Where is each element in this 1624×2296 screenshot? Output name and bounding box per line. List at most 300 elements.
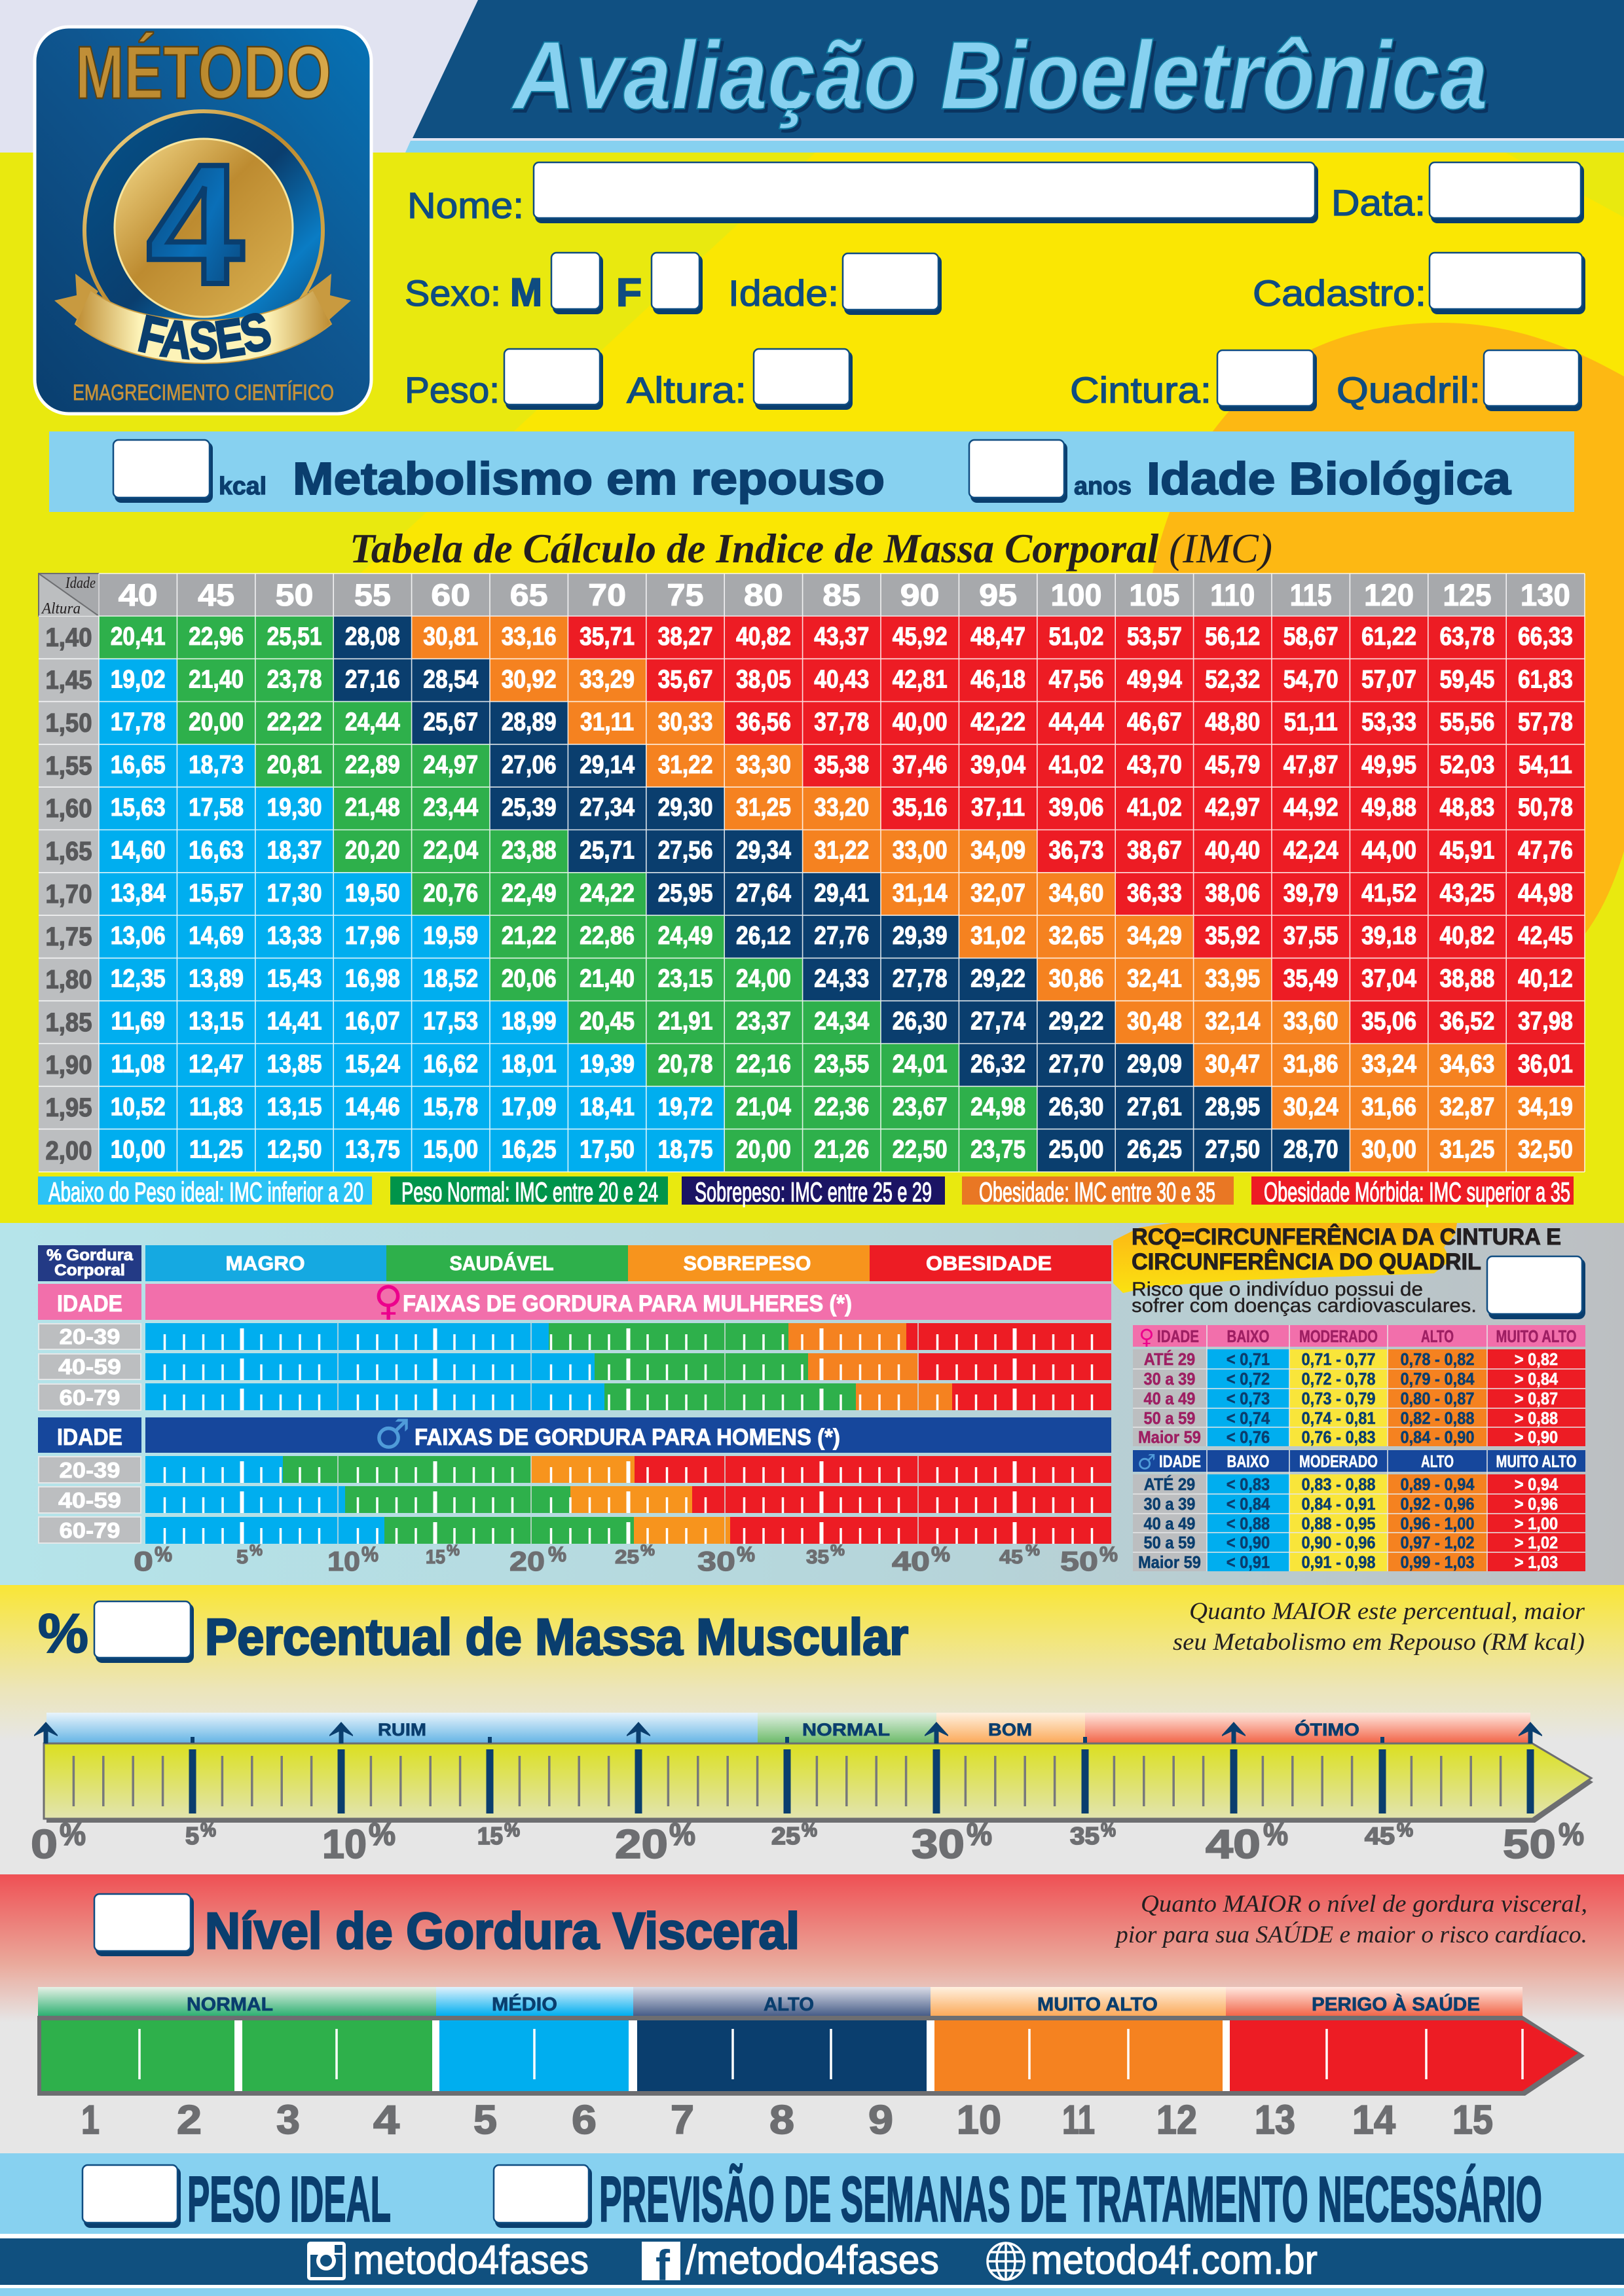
- row 2,00: 21,26: [814, 1135, 869, 1163]
- RCQ men table: 0,91 - 0,98: [1302, 1554, 1376, 1572]
- row 1,80: 35,49: [1283, 964, 1338, 993]
- visceral arrow bar: [37, 2016, 1585, 2096]
- row 1,70: 17,30: [267, 878, 322, 907]
- women header: FAIXAS DE GORDURA PARA MULHERES (*): [403, 1291, 852, 1317]
- row 1,70: 44,98: [1518, 878, 1573, 907]
- row 2,00: 28,70: [1283, 1135, 1338, 1163]
- row 1,85: 23,37: [736, 1006, 791, 1035]
- IMC legend: [38, 1176, 1574, 1207]
- height column: [39, 616, 99, 1172]
- row 1,55: 54,11: [1519, 750, 1572, 778]
- RCQ men table: 40 a 49: [1144, 1515, 1195, 1533]
- row 2,00: 10,00: [111, 1135, 166, 1163]
- row 1,70: 24,22: [580, 878, 635, 907]
- row 1,60: 50,78: [1518, 793, 1573, 822]
- table header: 120: [1364, 577, 1414, 612]
- row 1,85: 37,98: [1518, 1006, 1573, 1035]
- RCQ women table: < 0,71: [1227, 1351, 1270, 1369]
- row 2,00: 27,50: [1205, 1135, 1260, 1163]
- row 1,75: 37,55: [1283, 921, 1338, 950]
- row 1,40: 28,08: [345, 622, 400, 651]
- row 1,65: 31,22: [814, 835, 869, 864]
- table header: 110: [1210, 577, 1255, 612]
- IMC legend: Peso Normal: IMC entre 20 e 24: [401, 1176, 658, 1207]
- row 1,85: 20,45: [580, 1006, 635, 1035]
- row 1,70: 22,49: [502, 878, 557, 907]
- row 1,85: 29,22: [1049, 1006, 1103, 1035]
- muscle ruler arrow: [34, 1722, 1593, 1823]
- form fields: Peso:: [405, 369, 500, 410]
- RCQ description: Risco que o indivíduo possui de: [1132, 1279, 1423, 1300]
- visceral level numbers: 11: [1062, 2098, 1095, 2143]
- row 1,50: 36,56: [736, 707, 791, 736]
- row 1,60: 37,11: [971, 793, 1025, 822]
- RCQ men table: > 1,00: [1515, 1515, 1558, 1533]
- row 1,45: [99, 659, 1585, 702]
- row 1,40: 45,92: [893, 622, 948, 651]
- chart percent scale: 10: [327, 1546, 360, 1576]
- RCQ women table: Maior 59: [1138, 1429, 1201, 1447]
- row 1,55: 41,02: [1049, 750, 1103, 778]
- muscle percent scale: %: [967, 1817, 992, 1852]
- row 1,95: 28,95: [1205, 1092, 1260, 1121]
- chart header: % Gordura: [46, 1247, 134, 1264]
- row 1,65: 23,88: [502, 835, 557, 864]
- height column: 1,65: [46, 837, 92, 866]
- RCQ women table: 0,79 - 0,84: [1400, 1370, 1475, 1389]
- row 1,45: 57,07: [1361, 665, 1416, 693]
- table header: 65: [510, 577, 548, 612]
- row 1,40: 33,16: [502, 622, 557, 651]
- RCQ men table: 0,88 - 0,95: [1302, 1515, 1376, 1533]
- height column: 1,45: [46, 666, 92, 695]
- RCQ women table: < 0,74: [1227, 1410, 1270, 1428]
- RCQ heading: CIRCUNFERÊNCIA DO QUADRIL: [1132, 1248, 1481, 1275]
- row 2,00: [99, 1129, 1585, 1172]
- row 1,75: 19,59: [423, 921, 478, 950]
- row 1,60: 48,83: [1440, 793, 1494, 822]
- row 1,50: 28,89: [502, 707, 557, 736]
- RCQ men table: 50 a 59: [1144, 1534, 1195, 1552]
- visceral category strip: NORMAL: [187, 1994, 273, 2015]
- row 2,00: 11,25: [189, 1135, 243, 1163]
- row 1,60: [99, 787, 1585, 830]
- row 1,90: 24,01: [893, 1049, 948, 1078]
- row 1,90: 15,24: [345, 1049, 401, 1078]
- RCQ women table: 30 a 39: [1144, 1370, 1195, 1389]
- row 1,40: 40,82: [736, 622, 791, 651]
- RCQ men table: ALTO: [1421, 1451, 1454, 1471]
- RCQ women table: 0,78 - 0,82: [1400, 1351, 1475, 1369]
- row 1,65: 34,09: [970, 835, 1025, 864]
- row 1,90: 11,08: [111, 1049, 165, 1078]
- RCQ men table: ♂: [1137, 1449, 1156, 1474]
- row 1,65: 45,91: [1440, 835, 1494, 864]
- row 1,90: 36,01: [1518, 1049, 1573, 1078]
- row 1,45: 35,67: [658, 665, 712, 693]
- metabolism and biological age band: Idade Biológica: [1147, 453, 1511, 504]
- RCQ women table: 50 a 59: [1144, 1410, 1195, 1428]
- row 1,90: 33,24: [1361, 1049, 1417, 1078]
- row 1,95: 34,19: [1518, 1092, 1573, 1121]
- muscle percent scale: %: [1101, 1819, 1116, 1841]
- row 1,55: 49,95: [1361, 750, 1416, 778]
- muscle percent scale: %: [802, 1819, 817, 1841]
- footer: [0, 2234, 1624, 2296]
- height column: 1,75: [46, 922, 92, 951]
- row 1,95: 14,46: [345, 1092, 400, 1121]
- RCQ men table: 0,84 - 0,91: [1302, 1495, 1376, 1514]
- metabolism and biological age band: kcal: [219, 473, 267, 500]
- row 1,50: [99, 702, 1585, 744]
- row 1,95: 31,66: [1361, 1092, 1416, 1121]
- table header: 75: [667, 577, 703, 612]
- row 1,70: 13,84: [111, 878, 166, 907]
- row 1,90: 18,01: [502, 1049, 557, 1078]
- row 1,75: 22,86: [580, 921, 635, 950]
- row 1,50: 40,00: [893, 707, 948, 736]
- form fields: Nome:: [407, 185, 524, 226]
- visceral note: [1114, 1891, 1587, 1948]
- row 1,75: 13,06: [111, 921, 166, 950]
- height column: 1,50: [46, 709, 92, 738]
- row 1,45: 38,05: [736, 665, 791, 693]
- row 1,60: 42,97: [1205, 793, 1260, 822]
- row 1,80: [99, 958, 1585, 1001]
- row 1,50: 57,78: [1518, 707, 1573, 736]
- men header: FAIXAS DE GORDURA PARA HOMENS (*): [415, 1425, 840, 1450]
- row 1,95: 32,87: [1440, 1092, 1494, 1121]
- men age rows: [39, 1456, 1111, 1544]
- women header: [38, 1277, 1111, 1324]
- row 1,85: 17,53: [423, 1006, 478, 1035]
- height column: 1,60: [46, 794, 92, 823]
- muscle percent scale: 35: [1070, 1823, 1099, 1850]
- row 1,95: 21,04: [736, 1092, 792, 1121]
- table header: [39, 574, 1585, 617]
- row 1,70: 41,52: [1361, 878, 1416, 907]
- muscle category strip: BOM: [988, 1720, 1032, 1740]
- row 1,75: [99, 915, 1585, 958]
- row 1,65: 22,04: [423, 835, 479, 864]
- row 1,55: 22,89: [345, 750, 400, 778]
- RCQ men table: 0,83 - 0,88: [1302, 1476, 1376, 1494]
- row 1,40: 20,41: [111, 622, 166, 651]
- RCQ men table: 0,99 - 1,03: [1400, 1554, 1475, 1572]
- row 1,95: 11,83: [189, 1092, 243, 1121]
- chart percent scale: 50: [1060, 1546, 1098, 1576]
- women age rows: 40-59: [58, 1355, 121, 1379]
- muscle note: [1173, 1598, 1585, 1656]
- row 1,55: 18,73: [189, 750, 244, 778]
- bottom band: ideal weight and weeks: [0, 2153, 1624, 2235]
- RCQ women table: 0,74 - 0,81: [1302, 1410, 1376, 1428]
- RCQ women table: [1133, 1324, 1585, 1447]
- form fields: F: [616, 270, 642, 314]
- row 1,60: 21,48: [345, 793, 400, 822]
- chart percent scale: %: [931, 1542, 950, 1566]
- row 1,85: 24,34: [814, 1006, 870, 1035]
- table header: Idade: [65, 575, 96, 592]
- row 1,80: 13,89: [189, 964, 244, 993]
- RCQ men table: IDADE: [1159, 1451, 1201, 1471]
- row 1,55: 45,79: [1205, 750, 1260, 778]
- RCQ heading: [1132, 1224, 1561, 1275]
- table header: 55: [354, 577, 391, 612]
- row 1,65: 16,63: [189, 835, 244, 864]
- RCQ men table: > 0,96: [1515, 1495, 1558, 1514]
- row 1,50: 53,33: [1361, 707, 1416, 736]
- row 1,60: 17,58: [189, 793, 244, 822]
- men header: [38, 1410, 1111, 1458]
- RCQ men table: 0,92 - 0,96: [1400, 1495, 1475, 1514]
- RCQ heading: RCQ=CIRCUNFERÊNCIA DA CINTURA E: [1132, 1224, 1561, 1250]
- RCQ women table: < 0,73: [1227, 1390, 1270, 1408]
- row 1,85: 36,52: [1440, 1006, 1494, 1035]
- muscle percent scale: %: [504, 1819, 520, 1841]
- row 1,75: 17,96: [345, 921, 400, 950]
- RCQ men table: > 0,94: [1515, 1476, 1558, 1494]
- header banner: [405, 0, 1624, 153]
- row 1,85: 27,74: [970, 1006, 1026, 1035]
- icon: instagram: [307, 2242, 346, 2280]
- table header: 85: [822, 577, 860, 612]
- visceral category strip: ALTO: [764, 1994, 814, 2015]
- chart header: SAUDÁVEL: [449, 1252, 554, 1275]
- RCQ women table: ATÉ 29: [1144, 1349, 1195, 1369]
- row 1,50: 37,78: [814, 707, 869, 736]
- row 1,40: 38,27: [658, 622, 712, 651]
- row 1,55: 20,81: [267, 750, 322, 778]
- footer: metodo4f.com.br: [1031, 2238, 1318, 2283]
- row 1,45: 52,32: [1205, 665, 1260, 693]
- RCQ women table: 40 a 49: [1144, 1390, 1195, 1408]
- RCQ women table: BAIXO: [1227, 1326, 1269, 1346]
- RCQ men table: 0,90 - 0,96: [1302, 1534, 1376, 1552]
- RCQ men table: 30 a 39: [1144, 1495, 1195, 1514]
- visceral category strip: PERIGO À SAÚDE: [1312, 1993, 1480, 2015]
- row 1,65: 44,00: [1361, 835, 1416, 864]
- form fields: M: [510, 270, 542, 314]
- row 1,70: 36,33: [1127, 878, 1182, 907]
- row 1,40: 58,67: [1283, 622, 1338, 651]
- row 1,80: 40,12: [1518, 964, 1573, 993]
- muscle heading: Percentual de Massa Muscular: [205, 1608, 908, 1666]
- RCQ men table: 0,97 - 1,02: [1400, 1534, 1475, 1552]
- row 1,70: 27,64: [736, 878, 792, 907]
- chart percent scale: 45: [999, 1546, 1023, 1568]
- row 1,60: 33,20: [814, 793, 869, 822]
- chart percent scale: 35: [806, 1546, 829, 1568]
- visceral level numbers: 12: [1156, 2098, 1197, 2143]
- table header: 45: [198, 577, 234, 612]
- footer: metodo4fases: [353, 2238, 589, 2283]
- muscle percent scale: %: [1559, 1817, 1584, 1852]
- RCQ men table: 0,96 - 1,00: [1400, 1515, 1475, 1533]
- chart percent scale: %: [155, 1542, 172, 1566]
- row 1,95: 17,09: [502, 1092, 557, 1121]
- icon: facebook: f: [655, 2241, 671, 2289]
- row 1,70: 39,79: [1283, 878, 1338, 907]
- title: Avaliação Bioeletrônica: [510, 22, 1488, 130]
- height column: 1,55: [46, 752, 92, 780]
- row 1,70: 29,41: [814, 878, 869, 907]
- row 1,40: 63,78: [1440, 622, 1494, 651]
- visceral level numbers: 15: [1452, 2098, 1493, 2143]
- chart header: OBESIDADE: [926, 1252, 1052, 1275]
- row 1,90: 13,85: [267, 1049, 322, 1078]
- row 1,90: 27,70: [1049, 1049, 1103, 1078]
- muscle heading: %: [38, 1603, 88, 1664]
- row 1,85: 33,60: [1283, 1006, 1338, 1035]
- visceral level numbers: 14: [1352, 2098, 1395, 2143]
- row 1,55: [99, 744, 1585, 787]
- logo: Método 4 Fases: [33, 25, 373, 415]
- row 1,55: 39,04: [970, 750, 1026, 778]
- panel: muscle mass: [0, 1585, 1624, 1874]
- RCQ men table: < 0,83: [1227, 1476, 1270, 1494]
- logo: Método 4 Fases: EMAGRECIMENTO CIENTÍFICO: [73, 380, 334, 405]
- row 1,50: 30,33: [658, 707, 712, 736]
- row 2,00: 17,50: [580, 1135, 635, 1163]
- metabolism and biological age band: anos: [1074, 473, 1132, 500]
- RCQ women table: < 0,72: [1227, 1370, 1270, 1389]
- women age rows: [39, 1323, 1111, 1410]
- visceral level numbers: 7: [671, 2098, 694, 2143]
- chart header: [38, 1245, 1111, 1281]
- row 1,55: 27,06: [502, 750, 557, 778]
- row 1,95: 18,41: [580, 1092, 635, 1121]
- height column: 1,85: [46, 1008, 92, 1037]
- row 1,80: 16,98: [345, 964, 400, 993]
- row 1,65: [99, 830, 1585, 873]
- row 1,65: 25,71: [580, 835, 635, 864]
- RCQ men table: 0,89 - 0,94: [1400, 1476, 1475, 1494]
- row 1,40: 66,33: [1518, 622, 1573, 651]
- table header: 60: [431, 577, 470, 612]
- row 1,45: 30,92: [502, 665, 557, 693]
- RCQ men table: MODERADO: [1299, 1451, 1378, 1471]
- row 1,55: 24,97: [423, 750, 478, 778]
- RCQ women table: 0,82 - 0,88: [1400, 1410, 1475, 1428]
- table header: 80: [744, 577, 783, 612]
- row 1,70: 20,76: [423, 878, 478, 907]
- row 1,80: 23,15: [658, 964, 712, 993]
- height column: 1,95: [46, 1093, 92, 1122]
- women header: IDADE: [57, 1291, 122, 1317]
- table header: 130: [1521, 577, 1570, 612]
- row 1,60: 49,88: [1361, 793, 1416, 822]
- row 1,80: 24,33: [814, 964, 869, 993]
- muscle category strip: [46, 1713, 1530, 1743]
- row 1,45: 61,83: [1518, 665, 1573, 693]
- row 1,90: 29,09: [1127, 1049, 1182, 1078]
- row 2,00: 31,25: [1440, 1135, 1494, 1163]
- row 1,85: 32,14: [1205, 1006, 1261, 1035]
- row 2,00: 15,00: [423, 1135, 478, 1163]
- row 1,85: 21,91: [658, 1006, 712, 1035]
- row 1,55: 52,03: [1440, 750, 1494, 778]
- RCQ men table: MUITO ALTO: [1496, 1451, 1577, 1471]
- chart percent scale: 5: [236, 1546, 248, 1568]
- table header: 95: [979, 577, 1017, 612]
- row 1,95: 27,61: [1127, 1092, 1182, 1121]
- form fields: Cadastro:: [1253, 272, 1426, 314]
- metabolism and biological age band: [49, 431, 1574, 512]
- row 1,70: 34,60: [1049, 878, 1103, 907]
- row 1,50: 17,78: [111, 707, 166, 736]
- row 1,75: 26,12: [736, 921, 791, 950]
- row 2,00: 23,75: [970, 1135, 1025, 1163]
- muscle percent scale: [31, 1817, 1584, 1867]
- panel: visceral fat: [0, 1874, 1624, 2153]
- row 1,80: 30,86: [1049, 964, 1103, 993]
- row 1,95: 26,30: [1049, 1092, 1103, 1121]
- row 1,60: 15,63: [111, 793, 166, 822]
- row 1,40: 61,22: [1361, 622, 1416, 651]
- form fields: [405, 162, 1585, 411]
- row 1,90: 16,62: [423, 1049, 478, 1078]
- muscle percent scale: 30: [912, 1822, 965, 1867]
- row 1,45: 19,02: [111, 665, 166, 693]
- row 1,80: 15,43: [267, 964, 322, 993]
- IMC legend: Abaixo do Peso ideal: IMC inferior a 20: [48, 1176, 363, 1207]
- muscle percent scale: %: [1397, 1819, 1413, 1841]
- row 1,65: 27,56: [658, 835, 712, 864]
- chart percent scale: %: [249, 1542, 263, 1559]
- table header: 100: [1050, 577, 1101, 612]
- RCQ women table: > 0,88: [1515, 1410, 1558, 1428]
- row 1,45: 54,70: [1283, 665, 1338, 693]
- chart percent scale: %: [361, 1542, 378, 1566]
- muscle category strip: ÓTIMO: [1295, 1719, 1359, 1740]
- row 1,95: [99, 1086, 1585, 1129]
- RCQ women table: > 0,87: [1515, 1390, 1558, 1408]
- row 1,75: 39,18: [1361, 921, 1416, 950]
- row 1,75: 13,33: [267, 921, 322, 950]
- brush highlight: [1113, 1223, 1457, 1293]
- muscle percent scale: 45: [1365, 1823, 1395, 1850]
- table header: 40: [119, 577, 158, 612]
- row 1,85: 18,99: [502, 1006, 557, 1035]
- form fields: Idade:: [728, 272, 839, 314]
- row 1,85: 16,07: [345, 1006, 400, 1035]
- table header: 115: [1290, 577, 1332, 612]
- visceral level numbers: 2: [177, 2098, 202, 2143]
- chart percent scale: %: [640, 1542, 655, 1559]
- height column: 1,80: [46, 965, 92, 994]
- row 1,65: 14,60: [111, 835, 166, 864]
- row 2,00: 18,75: [658, 1135, 712, 1163]
- row 1,50: 44,44: [1049, 707, 1104, 736]
- muscle percent scale: %: [369, 1817, 396, 1852]
- row 1,90: 34,63: [1440, 1049, 1494, 1078]
- row 1,65: 33,00: [893, 835, 948, 864]
- form fields: Data:: [1331, 182, 1426, 223]
- muscle category strip: NORMAL: [802, 1720, 890, 1740]
- row 1,40: 22,96: [189, 622, 244, 651]
- row 1,65: 40,40: [1205, 835, 1260, 864]
- row 1,75: 24,49: [658, 921, 712, 950]
- muscle percent scale: %: [1263, 1817, 1288, 1852]
- row 1,95: 22,36: [814, 1092, 869, 1121]
- row 1,75: 40,82: [1440, 921, 1494, 950]
- row 1,45: 23,78: [267, 665, 322, 693]
- row 1,85: 13,15: [189, 1006, 244, 1035]
- chart header: SOBREPESO: [684, 1252, 811, 1275]
- row 1,70: 43,25: [1440, 878, 1494, 907]
- row 1,95: 19,72: [658, 1092, 712, 1121]
